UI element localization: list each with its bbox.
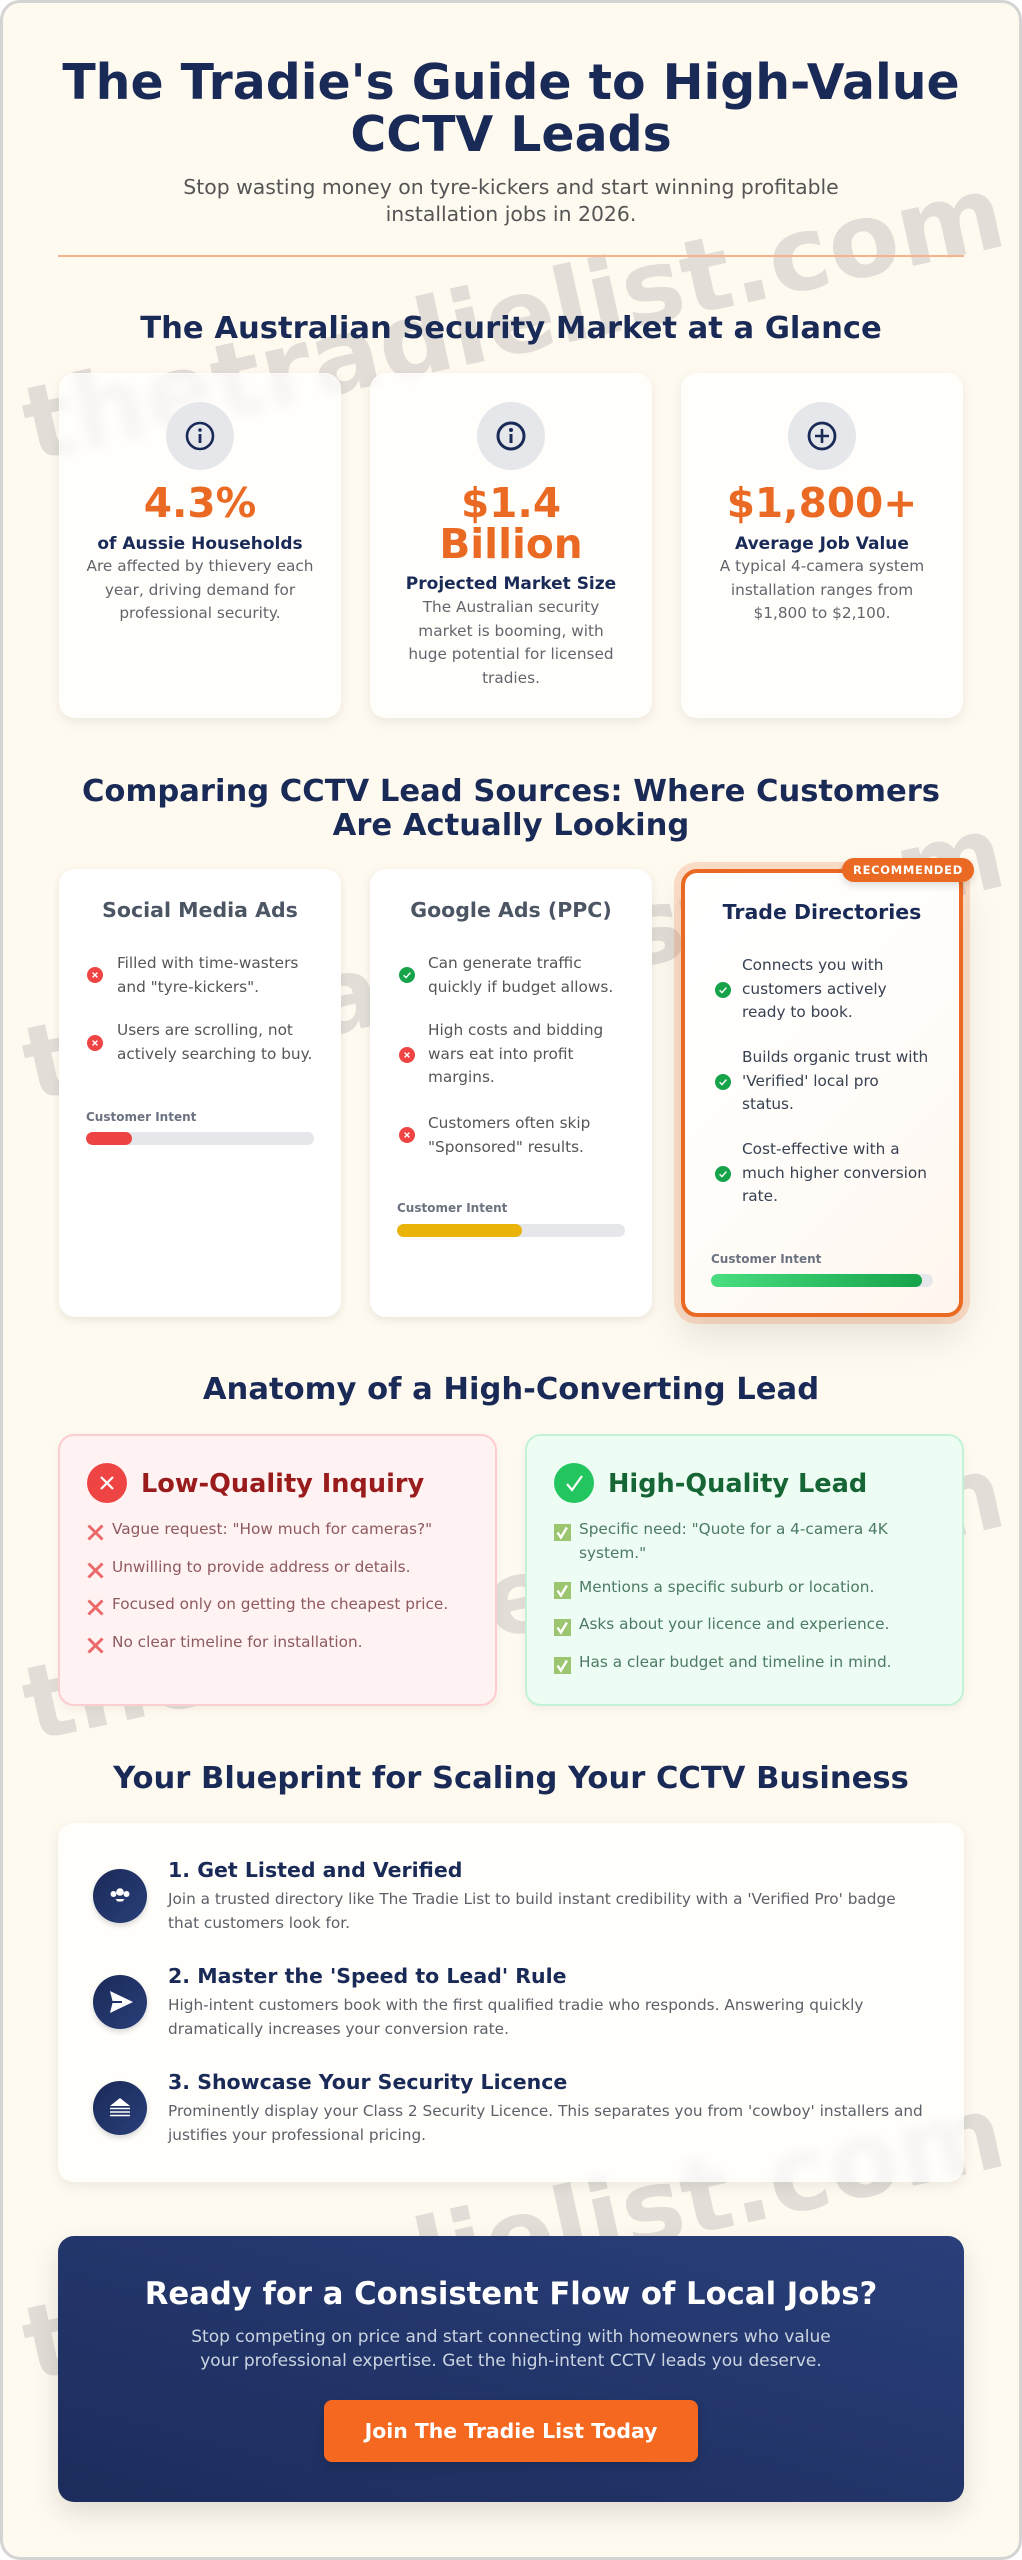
step 2: 2. Master the 'Speed to Lead' Rule (168, 1964, 567, 1988)
list item: traffic: quickly if budget allows. (428, 978, 613, 996)
list item: sponsored: "Sponsored" results. (428, 1138, 584, 1156)
icon: cross circle (87, 1463, 127, 1503)
step 3: Prominently display your Class 2 Security Licence. This separates you from 'cowboy' installers and (168, 2102, 923, 2120)
list item: connects: Connects you with (742, 956, 884, 974)
cta text (191, 2327, 831, 2371)
list: positive signs: Has a clear budget and timeline in mind. (579, 1652, 892, 1670)
list: positive signs (554, 1520, 892, 1674)
list item: time-wasters: and "tyre-kickers". (117, 978, 259, 996)
stat description (408, 598, 614, 687)
list item: scrolling: Users are scrolling, not (117, 1021, 293, 1039)
stat description (720, 557, 924, 622)
heading: blueprint: Your Blueprint for Scaling Your CCTV Business (113, 1761, 909, 1796)
watermark: repeating site name: thetradielist.com (12, 152, 1015, 485)
stat description: year, driving demand for (105, 581, 295, 599)
list item: cost-effective (715, 1140, 927, 1205)
icon: check circle (554, 1463, 594, 1503)
title: CCTV Leads (350, 106, 672, 163)
step 3: 3. Showcase Your Security Licence (168, 2070, 567, 2094)
subtitle (183, 175, 839, 226)
stat number: $1.4 (461, 479, 561, 527)
heading: comparing lead sources: Are Actually Looking (333, 808, 689, 842)
list: positive signs: Asks about your licence and experience. (579, 1615, 889, 1633)
icon: group (93, 1869, 147, 1923)
customer intent bar 55% (397, 1224, 625, 1237)
list item: trust (715, 1048, 928, 1113)
cta button (324, 2400, 698, 2462)
panel: blueprint steps (58, 1823, 964, 2182)
list: warning signs: No clear timeline for installation. (112, 1632, 363, 1650)
list item: cost-effective: rate. (742, 1187, 778, 1205)
panel: stat job value (681, 373, 963, 718)
list item: cost-effective: much higher conversion (742, 1164, 927, 1182)
panel: call to action (58, 2236, 964, 2502)
list item: trust: Builds organic trust with (742, 1048, 928, 1066)
panel: stat households (59, 373, 341, 718)
stat number: 4.3% (144, 479, 256, 527)
icon: licence stack (93, 2081, 147, 2135)
panel: low-quality inquiry (58, 1434, 497, 1706)
list item: high costs: High costs and bidding (428, 1021, 603, 1039)
step 3: justifies your professional pricing. (168, 2126, 426, 2144)
watermark: repeating site name: thetradielist.com (12, 1432, 1015, 1765)
panel: trade directories (recommended) (681, 869, 963, 1317)
list item: traffic (399, 954, 613, 996)
step 1: 1. Get Listed and Verified (168, 1858, 462, 1882)
card title: Trade Directories (723, 900, 921, 924)
heading: anatomy: Anatomy of a High-Converting Lead (203, 1372, 819, 1407)
list item: scrolling (87, 1021, 312, 1063)
customer intent bar 20% (86, 1132, 314, 1145)
cta heading: Ready for a Consistent Flow of Local Jobs? (145, 2277, 877, 2312)
list: positive signs: system." (579, 1544, 646, 1562)
stat number (439, 479, 583, 568)
step 2: High-intent customers book with the first qualified tradie who responds. Answering quickly (168, 1996, 863, 2014)
card title: Social Media Ads (102, 898, 298, 922)
recommended badge (842, 858, 974, 882)
heading: comparing lead sources: Comparing CCTV Lead Sources: Where Customers (82, 774, 940, 808)
heading: market at a glance: The Australian Security Market at a Glance (140, 311, 882, 346)
step 1: Join a trusted directory like The Tradie List to build instant credibility with a 'Verified Pro' badge (168, 1890, 896, 1908)
customer intent label: Customer Intent (711, 1252, 821, 1266)
customer intent label: Customer Intent (397, 1201, 507, 1215)
list: warning signs (88, 1520, 448, 1654)
panel: google ads (370, 869, 652, 1317)
list item: sponsored: Customers often skip (428, 1114, 590, 1132)
list item: time-wasters (87, 954, 298, 996)
subtitle: Stop wasting money on tyre-kickers and start winning profitable (183, 175, 839, 199)
list item: trust: 'Verified' local pro (742, 1072, 879, 1090)
cta text: Stop competing on price and start connecting with homeowners who value (191, 2327, 831, 2347)
stat description: installation ranges from (731, 581, 913, 599)
panel: stat market size (370, 373, 652, 718)
watermark: repeating site name: thetradielist.com (12, 792, 1015, 1125)
icon: paper plane (93, 1975, 147, 2029)
list item: connects: customers actively (742, 980, 887, 998)
list: positive signs: Specific need: "Quote for a 4-camera 4K (579, 1520, 888, 1538)
icon: plus (788, 402, 856, 470)
list item: trust: status. (742, 1095, 794, 1113)
card title: Google Ads (PPC) (410, 898, 612, 922)
list item: high costs: margins. (428, 1068, 495, 1086)
customer intent bar 95% (711, 1274, 933, 1287)
step 3 (91, 2070, 923, 2144)
cta button: Join The Tradie List Today (365, 2419, 657, 2443)
heading: comparing lead sources (82, 774, 940, 842)
list item: high costs (399, 1021, 603, 1086)
step 1 (91, 1858, 896, 1932)
stat description: market is booming, with (418, 622, 604, 640)
stat description: A typical 4-camera system (720, 557, 924, 575)
stat label: Projected Market Size (406, 574, 616, 594)
panel: social media ads (59, 869, 341, 1317)
list item: cost-effective: Cost-effective with a (742, 1140, 900, 1158)
stat description: huge potential for licensed (408, 645, 614, 663)
stat description: The Australian security (423, 598, 599, 616)
step 1: that customers look for. (168, 1914, 350, 1932)
list: warning signs: Vague request: "How much for cameras?" (112, 1520, 432, 1538)
list item: high costs: wars eat into profit (428, 1045, 573, 1063)
title (62, 54, 960, 163)
step 2 (91, 1964, 863, 2038)
stat number: Billion (439, 520, 583, 568)
panel heading: High-Quality Lead (608, 1469, 867, 1499)
icon: info (166, 402, 234, 470)
list item: connects (715, 956, 887, 1021)
panel heading: Low-Quality Inquiry (141, 1469, 424, 1499)
list item: traffic: Can generate traffic (428, 954, 582, 972)
stat label: of Aussie Households (97, 534, 303, 554)
stat description: $1,800 to $2,100. (754, 604, 890, 622)
list item: sponsored (399, 1114, 590, 1156)
stat description: professional security. (119, 604, 281, 622)
stat label: Average Job Value (735, 534, 909, 554)
list item: scrolling: actively searching to buy. (117, 1045, 312, 1063)
watermark: repeating site name: thetradielist.com (12, 2072, 1015, 2405)
list item: time-wasters: Filled with time-wasters (117, 954, 298, 972)
subtitle: installation jobs in 2026. (386, 202, 636, 226)
list: warning signs: Focused only on getting the cheapest price. (112, 1595, 448, 1613)
recommended badge: RECOMMENDED (853, 863, 963, 877)
list: warning signs: Unwilling to provide address or details. (112, 1558, 410, 1576)
title: The Tradie's Guide to High-Value (62, 54, 960, 111)
panel: high-quality lead (525, 1434, 964, 1706)
list: positive signs: Mentions a specific suburb or location. (579, 1578, 874, 1596)
list item: connects: ready to book. (742, 1003, 853, 1021)
stat description: tradies. (482, 669, 540, 687)
stat description (86, 557, 313, 622)
customer intent label: Customer Intent (86, 1110, 196, 1124)
stat description: Are affected by thievery each (87, 557, 313, 575)
header divider (58, 255, 964, 257)
icon: info (477, 402, 545, 470)
cta text: your professional expertise. Get the high-intent CCTV leads you deserve. (200, 2351, 822, 2371)
stat number: $1,800+ (727, 479, 917, 527)
step 2: dramatically increases your conversion rate. (168, 2020, 509, 2038)
